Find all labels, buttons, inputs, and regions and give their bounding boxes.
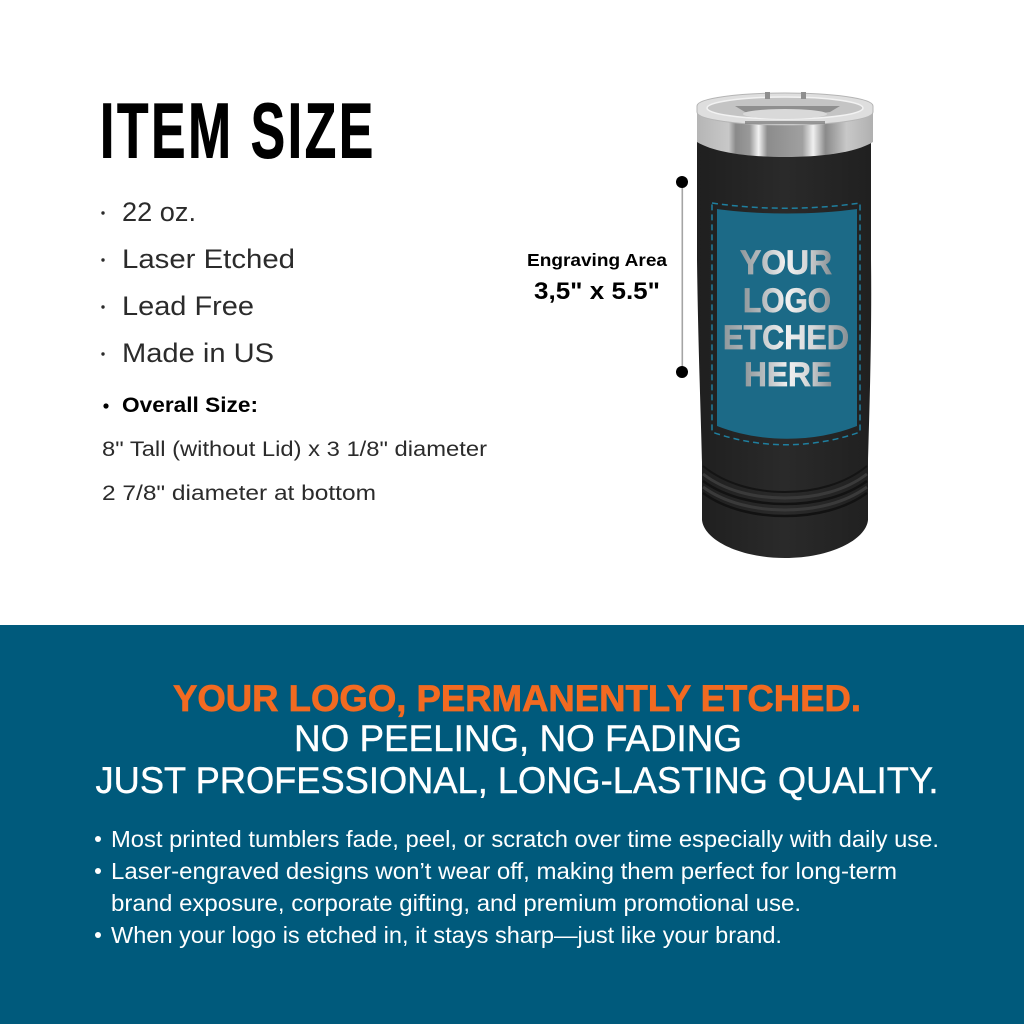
bullet: 22 oz.: 22 oz. [122, 197, 196, 227]
size line: bottom diameter: 2 7/8" diameter at bottom [102, 482, 376, 505]
headline: YOUR LOGO, PERMANENTLY ETCHED. [173, 678, 861, 719]
headline [96, 678, 938, 801]
overall size block [102, 394, 487, 505]
steel rim [697, 112, 873, 157]
size line: tall: 8" Tall (without Lid) x 3 1/8" diameter [102, 438, 487, 461]
title: ITEM SIZE [100, 88, 373, 175]
etched logo text [723, 244, 849, 394]
teal logo panel [717, 209, 857, 439]
etched logo text: HERE [744, 356, 832, 394]
bullet: Lead Free: Lead Free [122, 291, 254, 321]
engraving area label [527, 250, 667, 305]
tumbler base ridges [703, 466, 867, 516]
engraving area dashed outline [712, 203, 860, 445]
benefit bullets: Most printed tumblers fade, peel, or scratch over time especially with daily use. [111, 826, 939, 852]
etched logo text: YOUR [740, 244, 832, 282]
engraving area label: 3,5" x 5.5" [534, 278, 660, 305]
blue panel: benefits [0, 625, 1024, 1024]
bullet: Made in US: Made in US [122, 338, 274, 368]
etched logo text: LOGO [743, 282, 831, 320]
tumbler body [697, 140, 871, 558]
tumbler illustration [697, 92, 873, 558]
benefit bullets [95, 826, 939, 948]
bullet: Laser Etched: Laser Etched [122, 244, 295, 274]
benefit bullets: Laser-engraved designs won’t wear off, making them perfect for long-term [111, 858, 897, 884]
overall size heading: Overall Size: [122, 394, 258, 417]
etched logo text: ETCHED [723, 319, 849, 357]
bullet list: item specifications [101, 197, 295, 368]
engraving height marker [676, 176, 688, 378]
benefit bullets: When your logo is etched in, it stays sharp—just like your brand. [111, 922, 782, 948]
benefit bullets: brand exposure, corporate gifting, and premium promotional use. [111, 890, 801, 916]
engraving area label: Engraving Area [527, 250, 667, 270]
headline: NO PEELING, NO FADING [294, 718, 742, 759]
headline: JUST PROFESSIONAL, LONG-LASTING QUALITY. [96, 760, 938, 801]
clear lid [697, 92, 873, 125]
